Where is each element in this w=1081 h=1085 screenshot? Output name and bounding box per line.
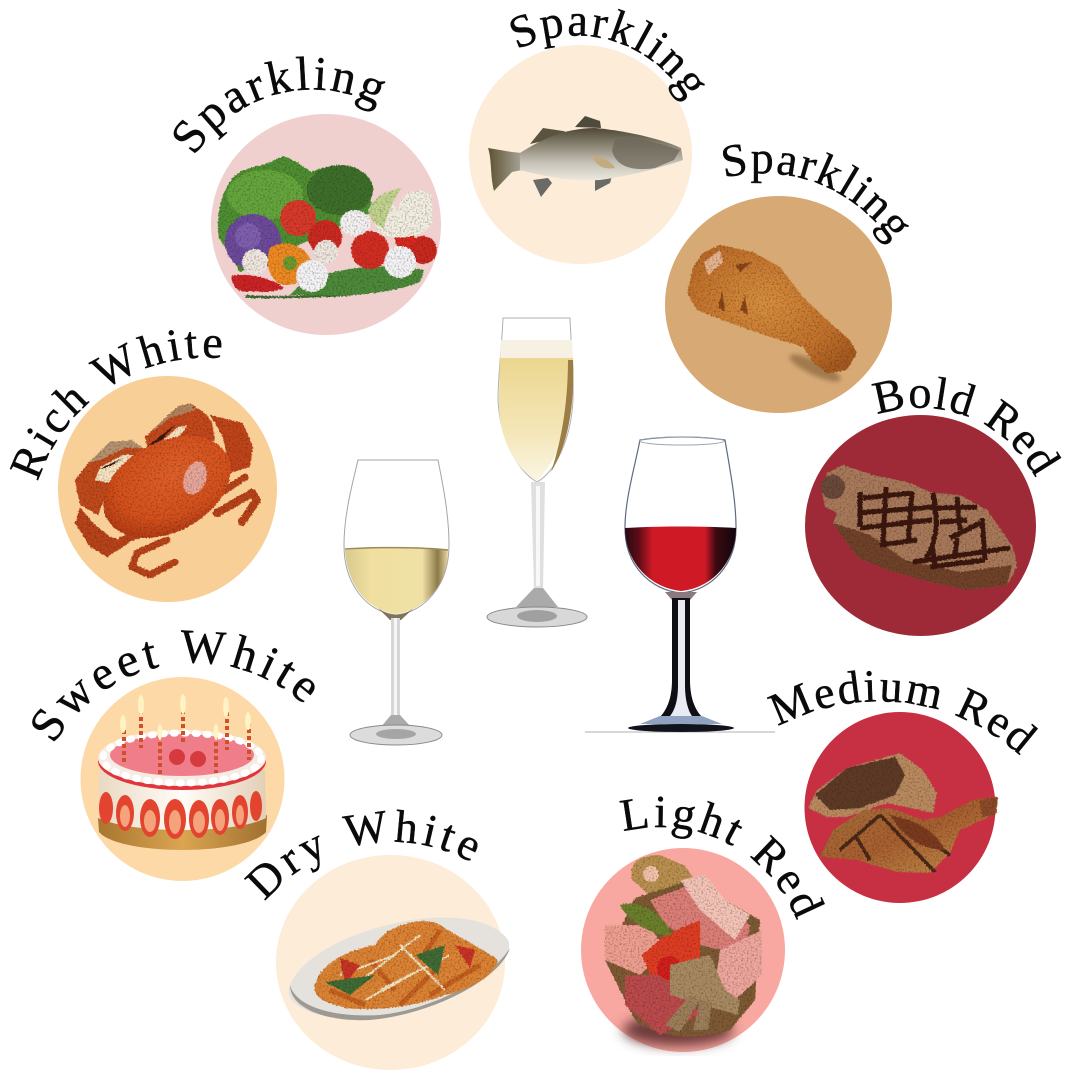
label: Bold Red: Bold Red: [871, 376, 1062, 478]
circle background: [211, 114, 441, 335]
circle background: [276, 855, 505, 1070]
panel: crab with Rich White: [10, 330, 277, 602]
panel: fish with Sparkling: [469, 8, 705, 264]
icon: white wine glass: [344, 460, 449, 745]
icon: pasta plate: [289, 918, 510, 1020]
label: Sparkling: Sparkling: [174, 56, 386, 154]
circle background: [804, 712, 996, 903]
icon: champagne flute: [487, 318, 587, 627]
circle background: [58, 376, 277, 602]
icon: grilled chicken: [808, 753, 998, 873]
circle background: [805, 415, 1036, 636]
blurred shadow: [787, 350, 843, 386]
panel: steak with Bold Red: [805, 376, 1062, 636]
circle background: [665, 196, 892, 413]
icon: steak: [821, 465, 1017, 590]
blurred shadow: [623, 1014, 733, 1046]
panel: fried chicken with Sparkling: [665, 144, 909, 413]
label: Sweet White: Sweet White: [32, 630, 315, 742]
icon: red wine glass: [585, 437, 775, 732]
icon: charcuterie board: [605, 855, 762, 1037]
circle background: [469, 45, 692, 264]
label: Light Red: Light Red: [619, 796, 825, 920]
icon: fish: [488, 116, 683, 197]
icon: fried chicken leg: [687, 245, 857, 373]
panel: pasta with Dry White: [244, 809, 510, 1070]
panel: grilled chicken with Medium Red: [766, 670, 1038, 903]
label: Medium Red: Medium Red: [766, 670, 1038, 756]
circle background: [80, 677, 284, 881]
icon: birthday cake: [98, 694, 267, 850]
icon: vegetables: [218, 156, 437, 298]
panel: vegetables with Sparkling: [174, 56, 441, 335]
panel: charcuterie with Light Red: [581, 796, 825, 1056]
label: Dry White: Dry White: [244, 809, 478, 901]
circle background: [581, 848, 785, 1052]
icon: crab: [75, 403, 257, 575]
panel: cake with Sweet White: [32, 630, 315, 881]
label: Sparkling: Sparkling: [722, 144, 909, 244]
label: Rich White: Rich White: [10, 330, 222, 480]
